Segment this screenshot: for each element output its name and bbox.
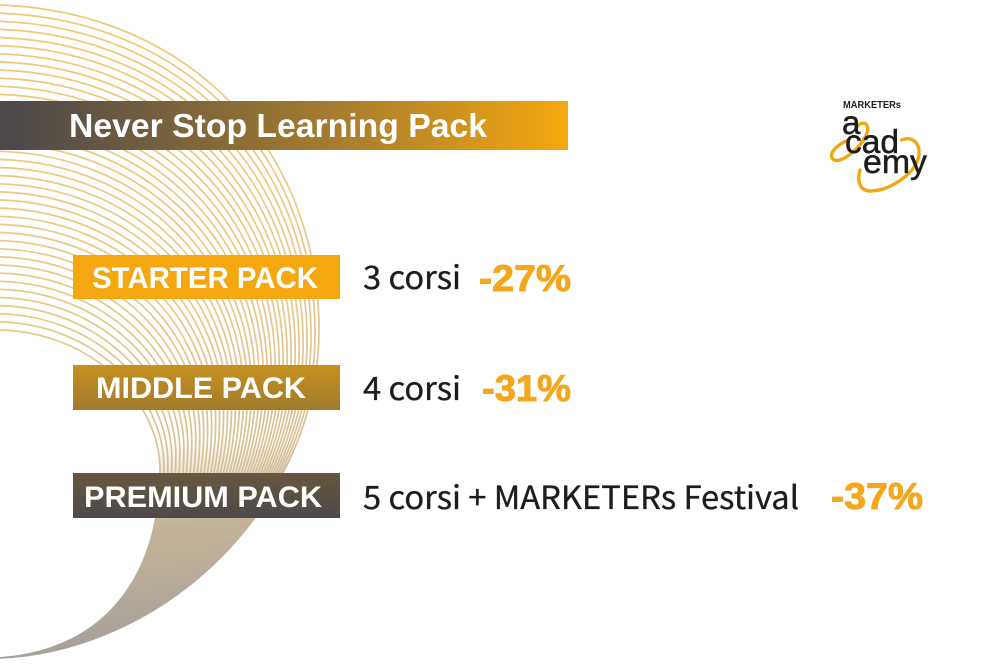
decorative swoosh of concentric lines [0,5,319,658]
row: starter pack: -27% [479,258,571,299]
row: premium pack [73,473,923,519]
row: starter pack: STARTER PACK [92,262,318,295]
logo: MARKETERs academy [831,99,928,191]
row: middle pack: -31% [482,368,571,409]
row: starter pack: 3 corsi [363,253,461,299]
row: starter pack [73,253,571,299]
logo: MARKETERs academy: a [842,104,861,141]
row: middle pack: 4 corsi [363,364,461,410]
row: premium pack: -37% [831,476,923,517]
logo: MARKETERs academy: MARKETERs [843,99,901,111]
title banner [0,101,568,150]
logo: MARKETERs academy: emy [863,143,928,180]
row: premium pack: 5 corsi + MARKETERs Festival [363,473,799,519]
row: premium pack: PREMIUM PACK [84,481,322,514]
logo: MARKETERs academy: cad [845,123,899,160]
title: Never Stop Learning Pack [69,107,488,144]
row: middle pack: MIDDLE PACK [96,372,306,405]
row: middle pack [73,364,571,410]
